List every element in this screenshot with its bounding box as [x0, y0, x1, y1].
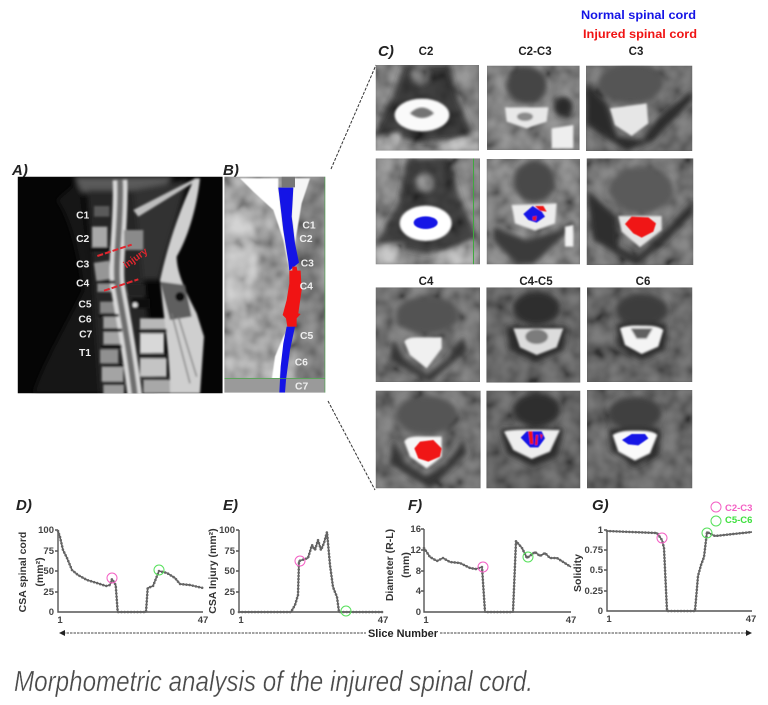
chart G: solidity: 1: [606, 614, 612, 625]
chart G: solidity: 1: [598, 525, 604, 536]
chart D: CSA spinal cord: 50: [43, 566, 54, 577]
panel A: sagittal MRI: A): [11, 162, 28, 179]
axial C2: [373, 65, 479, 151]
markers E: [295, 556, 351, 616]
axis G: [604, 530, 752, 611]
vertebra labels A: T1: [79, 348, 91, 359]
chart E: CSA injury: 47: [378, 615, 388, 626]
level headings upper: C2-C3: [518, 46, 552, 58]
level headings upper: [419, 46, 643, 58]
injured cord segmentation: [283, 267, 302, 327]
injury dashed boundary lines: [97, 245, 138, 291]
axis F: [421, 529, 571, 612]
level headings lower: [419, 276, 650, 288]
chart F: diameter: 47: [566, 615, 576, 626]
chart G: solidity: [572, 497, 756, 625]
vertebra labels A: C5: [78, 299, 92, 310]
panel B: segmented sagittal view: [223, 162, 325, 393]
vertebra labels A: C3: [76, 260, 90, 271]
level headings lower: C6: [636, 276, 650, 288]
dashed zoom connector lines: [328, 65, 376, 490]
vertebra labels B: C1: [302, 221, 316, 232]
chart F: diameter: 0: [416, 607, 421, 618]
panel B: segmented sagittal view: B): [223, 162, 239, 179]
axial C2 segmented: [376, 158, 480, 264]
chart E: CSA injury: 75: [224, 546, 236, 557]
vertebra labels A: C4: [76, 279, 90, 290]
injury label: injury: [122, 246, 150, 271]
slice number axis arrows: Slice Number: [368, 628, 439, 640]
level headings upper: C3: [629, 46, 643, 58]
chart E: CSA injury: 25: [224, 587, 236, 598]
slice number axis arrows: [59, 628, 752, 640]
chart D: CSA spinal cord: CSA spinal cord: [17, 532, 29, 612]
chart E: CSA injury: 1: [238, 615, 244, 626]
panel C: axial images: [373, 43, 693, 488]
chart D: CSA spinal cord: 0: [49, 607, 54, 618]
chart F: diameter: Diameter (R-L): [384, 529, 396, 601]
data line F: [424, 541, 571, 612]
vertebra labels A: [76, 210, 93, 359]
axis D: [55, 530, 203, 612]
markers G: [657, 528, 712, 543]
chart D: CSA spinal cord: 47: [198, 615, 208, 626]
axial C2-C3: [487, 66, 580, 150]
vertebra labels A: C7: [79, 330, 93, 341]
normal cord segmentation: [278, 188, 299, 393]
chart E: CSA injury: [207, 497, 388, 626]
chart G: solidity: G): [592, 497, 609, 514]
vertebra labels B: C4: [300, 281, 313, 292]
chart F: diameter: 12: [410, 545, 421, 556]
chart F: diameter: 4: [416, 586, 422, 597]
chart G: solidity: 47: [746, 614, 756, 625]
chart E: CSA injury: CSA Injury (mm²): [207, 528, 219, 614]
panel C: axial images: C): [378, 43, 394, 60]
axial C6 segmented: [587, 390, 692, 488]
chart D: CSA spinal cord: (mm²): [34, 557, 46, 587]
axial C4-C5 segmented: [486, 391, 580, 488]
axial C3: [586, 63, 692, 151]
axial C6: [587, 287, 692, 382]
panel A: sagittal MRI: [11, 162, 223, 397]
vertebra labels B: C2: [299, 234, 313, 245]
marker legend: C5-C6: [725, 515, 752, 526]
chart D: CSA spinal cord: 100: [38, 525, 54, 536]
vertebra labels B: [295, 221, 316, 392]
chart F: diameter: F): [408, 497, 422, 514]
chart F: diameter: (mm): [400, 552, 412, 578]
chart G: solidity: 0.75: [584, 545, 604, 556]
chart G: solidity: 0.5: [590, 565, 604, 576]
marker legend: [711, 502, 752, 526]
vertebra labels A: C2: [76, 234, 90, 245]
chart D: CSA spinal cord: 1: [57, 615, 63, 626]
chart D: CSA spinal cord: 25: [43, 587, 55, 598]
vertebra labels B: C7: [295, 381, 309, 392]
chart F: diameter: 16: [410, 524, 421, 535]
chart E: CSA injury: 100: [219, 525, 235, 536]
markers D: [107, 565, 164, 583]
legend: normal and injured spinal cord: Injured spinal cord: [583, 27, 697, 41]
data line G: [607, 531, 752, 611]
marker legend: C2-C3: [725, 503, 752, 514]
axial C2-C3 segmented: [487, 159, 580, 264]
markers F: [478, 552, 533, 572]
level headings lower: C4: [419, 276, 434, 288]
chart G: solidity: 0: [598, 606, 603, 617]
vertebra labels A: C1: [76, 210, 90, 221]
axial C3 segmented: [587, 158, 693, 265]
vertebra labels B: C3: [301, 259, 314, 270]
chart F: diameter: 1: [423, 615, 429, 626]
level headings lower: C4-C5: [519, 276, 553, 288]
axis E: [236, 530, 383, 612]
chart E: CSA injury: 0: [230, 607, 235, 618]
chart D: CSA spinal cord: 75: [43, 546, 55, 557]
vertebra labels B: C6: [295, 358, 308, 369]
legend: normal and injured spinal cord: [581, 8, 697, 41]
chart D: CSA spinal cord: D): [16, 497, 32, 514]
caption: Morphometric analysis of the injured spinal cord.: [14, 666, 533, 698]
chart D: CSA spinal cord: [16, 497, 208, 626]
axial C4-C5: [486, 287, 580, 383]
chart E: CSA injury: E): [223, 497, 238, 514]
data line E: [239, 532, 383, 612]
level headings upper: C2: [419, 46, 433, 58]
legend: normal and injured spinal cord: Normal spinal cord: [581, 8, 696, 22]
chart F: diameter: [384, 497, 576, 626]
axial C4 segmented: [376, 391, 481, 488]
vertebra labels B: C5: [300, 331, 314, 342]
vertebra labels A: C6: [78, 315, 92, 326]
data line D: [58, 531, 203, 612]
chart E: CSA injury: 50: [224, 566, 235, 577]
chart G: solidity: 0.25: [584, 586, 604, 597]
chart F: diameter: 8: [416, 566, 421, 577]
chart G: solidity: Solidity: [572, 554, 584, 592]
axial C4: [376, 287, 480, 382]
